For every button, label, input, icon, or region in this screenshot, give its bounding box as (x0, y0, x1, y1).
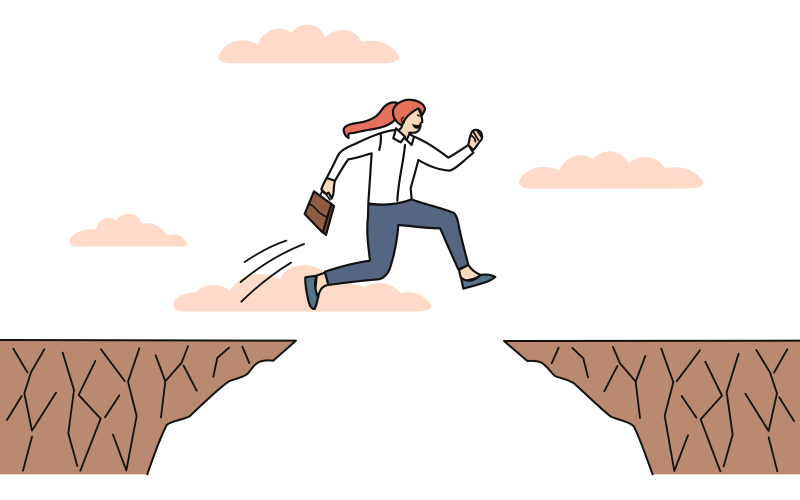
ear and mouth (402, 117, 404, 123)
case side (323, 203, 334, 235)
front foot (459, 265, 481, 281)
cliff edge outline (0, 340, 296, 474)
trousers (325, 199, 468, 285)
back shoe (305, 276, 318, 309)
left cliff (0, 340, 296, 474)
woman jumping (305, 100, 495, 309)
shirt (327, 130, 473, 205)
cloud: bottom, behind figure (173, 265, 432, 312)
right cliff (504, 341, 800, 474)
collar (393, 128, 414, 145)
ponytail (344, 102, 397, 138)
motion lines (241, 241, 304, 302)
eye (417, 113, 419, 118)
case flap (309, 204, 327, 217)
cloud: right (519, 151, 703, 189)
handle (320, 192, 330, 200)
cracks (552, 347, 794, 471)
back foot (315, 273, 328, 297)
cracks (7, 346, 249, 471)
briefcase (305, 191, 334, 235)
cliff body (504, 341, 800, 474)
front shoe (461, 275, 495, 289)
right fist (468, 130, 482, 150)
left hand holding briefcase (321, 178, 335, 199)
cloud: top (218, 25, 399, 63)
cloud: left (69, 214, 187, 247)
case body (305, 191, 331, 233)
hair (393, 100, 425, 125)
shirt details: placket and fold (397, 145, 405, 201)
neck and face (395, 108, 422, 145)
cliff edge outline (504, 341, 800, 474)
cliff body (0, 340, 296, 474)
